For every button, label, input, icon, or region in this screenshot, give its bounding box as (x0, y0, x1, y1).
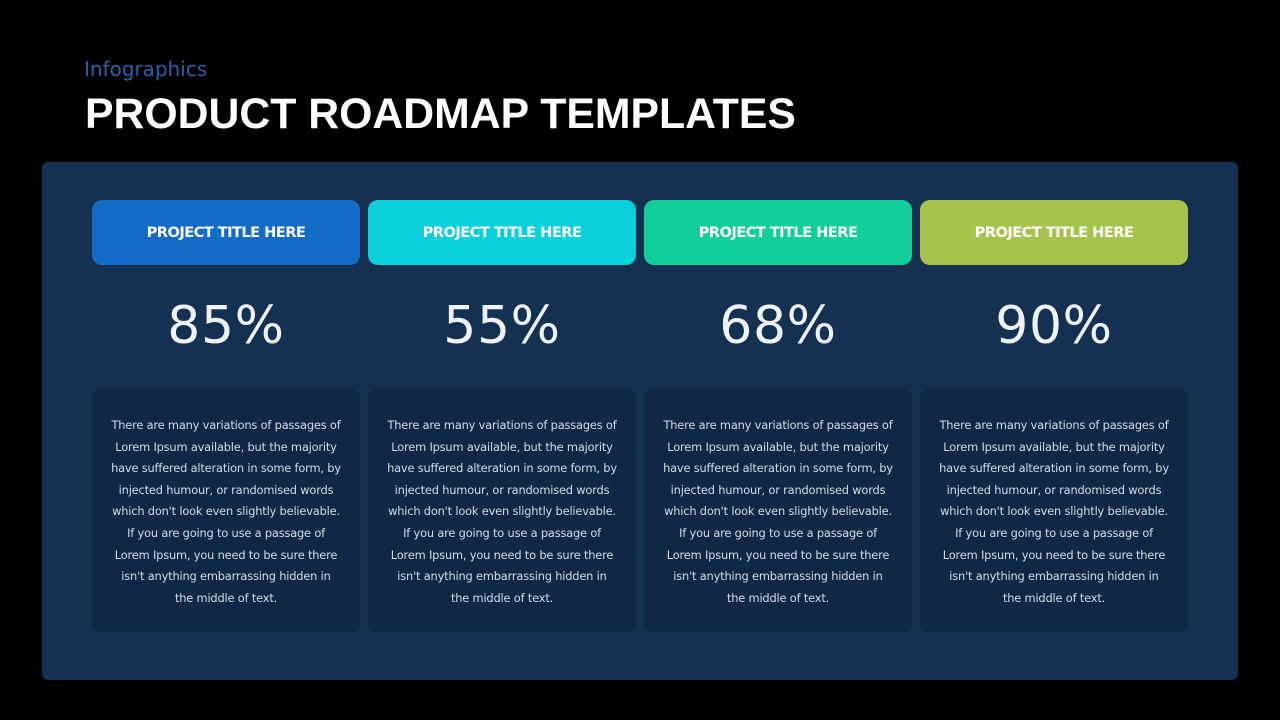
text box: project 3: which don't look even slightly believable. (664, 504, 892, 518)
text box: project 3: injected humour, or randomised words (671, 483, 885, 497)
text box: project 1: There are many variations of passages of (111, 418, 341, 432)
text box: project 2: which don't look even slightly believable. (388, 504, 616, 518)
text box: project 1: the middle of text. (175, 591, 277, 605)
text box: project 1: Lorem Ipsum, you need to be sure there (115, 548, 337, 562)
text box: project 4: Lorem Ipsum, you need to be sure there (943, 548, 1165, 562)
text box: project 4 (920, 389, 1188, 632)
text box: project 4: the middle of text. (1003, 591, 1105, 605)
text box: project 1: isn't anything embarrassing hidden in (121, 569, 331, 583)
text box: project 2 (368, 389, 636, 632)
text box: project 1: have suffered alteration in some form, by (111, 461, 341, 475)
text box: project 3: Lorem Ipsum, you need to be sure there (667, 548, 889, 562)
percentage: project 3: 68% (719, 296, 837, 356)
text box: project 1: injected humour, or randomised words (119, 483, 333, 497)
text box: project 4: have suffered alteration in some form, by (939, 461, 1169, 475)
header: project 1: PROJECT TITLE HERE (147, 224, 305, 241)
text box: project 3: have suffered alteration in some form, by (663, 461, 893, 475)
text box: project 2: If you are going to use a passage of (403, 526, 601, 540)
text box: project 4: If you are going to use a passage of (955, 526, 1153, 540)
text box: project 3: isn't anything embarrassing hidden in (673, 569, 883, 583)
text box: project 4: which don't look even slightly believable. (940, 504, 1168, 518)
header: project 3 (644, 200, 912, 265)
title: PRODUCT ROADMAP TEMPLATES (85, 90, 796, 138)
text box: project 2: Lorem Ipsum available, but the majority (391, 440, 613, 454)
percentage: project 1: 85% (167, 296, 285, 356)
text box: project 2: isn't anything embarrassing hidden in (397, 569, 607, 583)
text box: project 3: Lorem Ipsum available, but the majority (667, 440, 889, 454)
percentage: project 4: 90% (995, 296, 1113, 356)
text box: project 4: Lorem Ipsum available, but the majority (943, 440, 1165, 454)
panel: main background (42, 162, 1238, 680)
text box: project 4: There are many variations of passages of (939, 418, 1169, 432)
header: project 4: PROJECT TITLE HERE (975, 224, 1133, 241)
text box: project 1 (92, 389, 360, 632)
text box: project 4: isn't anything embarrassing hidden in (949, 569, 1159, 583)
text box: project 1: which don't look even slightly believable. (112, 504, 340, 518)
header: project 3: PROJECT TITLE HERE (699, 224, 857, 241)
text box: project 2: Lorem Ipsum, you need to be sure there (391, 548, 613, 562)
text box: project 2: the middle of text. (451, 591, 553, 605)
text box: project 2: There are many variations of passages of (387, 418, 617, 432)
text box: project 1: Lorem Ipsum available, but the majority (115, 440, 337, 454)
text box: project 3 (644, 389, 912, 632)
header: project 4 (920, 200, 1188, 265)
header: project 2: PROJECT TITLE HERE (423, 224, 581, 241)
text box: project 3: If you are going to use a passage of (679, 526, 877, 540)
header: project 1 (92, 200, 360, 265)
text box: project 3: the middle of text. (727, 591, 829, 605)
text box: project 1: If you are going to use a passage of (127, 526, 325, 540)
text box: project 4: injected humour, or randomised words (947, 483, 1161, 497)
text box: project 3: There are many variations of passages of (663, 418, 893, 432)
percentage: project 2: 55% (443, 296, 561, 356)
subtitle: Infographics (84, 57, 207, 81)
text box: project 2: injected humour, or randomised words (395, 483, 609, 497)
text box: project 2: have suffered alteration in some form, by (387, 461, 617, 475)
header: project 2 (368, 200, 636, 265)
